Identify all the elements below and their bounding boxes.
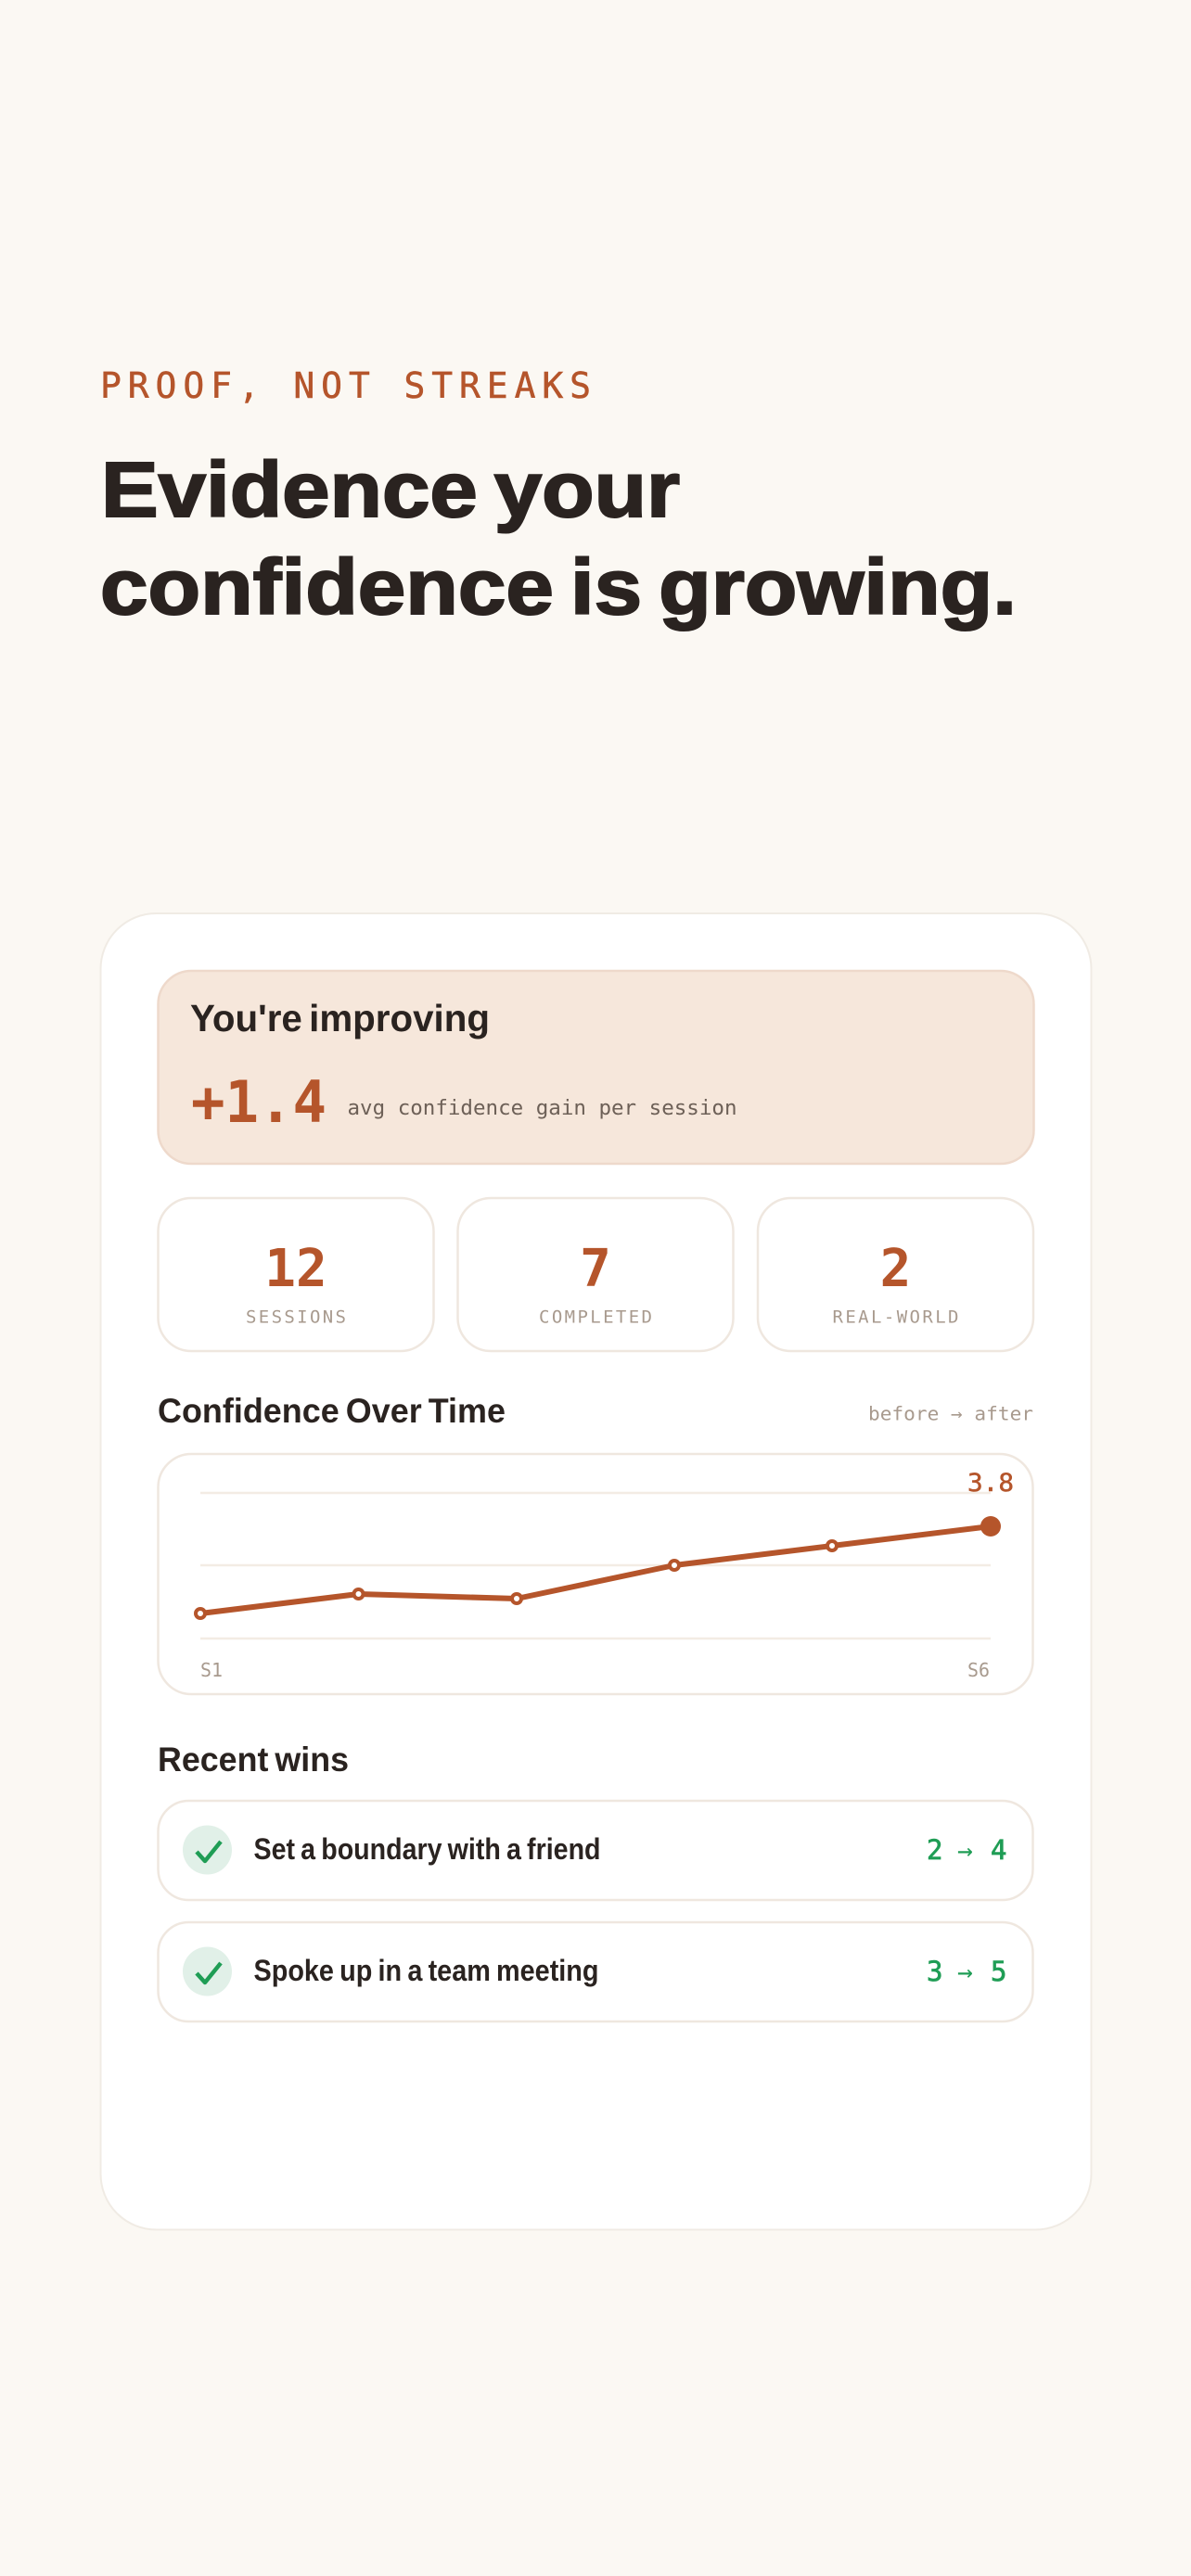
heading: confidence over time: Confidence Over Time: [158, 1392, 506, 1430]
heading: you're improving: You're improving: [190, 997, 490, 1039]
score change: 2: [927, 1834, 942, 1866]
win row: boundary: [158, 1801, 1033, 1900]
score change: 4: [991, 1834, 1006, 1866]
x axis start label: S1: [200, 1659, 223, 1681]
win text: Spoke up in a team meeting: [254, 1954, 599, 1987]
stat: completed: 7: [580, 1239, 611, 1299]
stat: real-world: [758, 1198, 1033, 1351]
heading: recent wins: Recent wins: [158, 1741, 349, 1779]
stat: real-world: REAL-WORLD: [833, 1307, 959, 1328]
metric: average gain: +1.4: [191, 1068, 327, 1136]
score change: [927, 1834, 1006, 1866]
line chart: [158, 1454, 1033, 1694]
score change: 3: [927, 1956, 942, 1987]
win text: Set a boundary with a friend: [254, 1832, 601, 1866]
metric caption: avg confidence gain per session: [347, 1096, 736, 1120]
panel: improvement summary: [158, 971, 1033, 1164]
score change: [927, 1956, 1006, 1987]
end value label: 3.8: [967, 1469, 1014, 1498]
stat: completed: COMPLETED: [539, 1307, 652, 1328]
icon: check: [183, 1825, 232, 1875]
stat: completed: [458, 1198, 733, 1351]
panel: progress card: [100, 913, 1091, 2229]
score change: →: [957, 1957, 973, 1987]
eyebrow label: PROOF, NOT STREAKS: [100, 365, 591, 406]
x axis end label: S6: [967, 1659, 990, 1681]
stat: sessions: SESSIONS: [246, 1307, 346, 1328]
score change: →: [957, 1835, 973, 1866]
title: confidence is growing.: [100, 543, 1017, 631]
icon: check: [183, 1947, 232, 1996]
title: Evidence your: [101, 446, 680, 533]
stat: sessions: [158, 1198, 434, 1351]
chart legend: before → after: [868, 1402, 1033, 1424]
stat: real-world: 2: [880, 1239, 911, 1299]
stat: sessions: 12: [264, 1239, 327, 1299]
win row: team meeting: [158, 1922, 1033, 2021]
score change: 5: [991, 1956, 1006, 1987]
title: [100, 446, 1017, 631]
